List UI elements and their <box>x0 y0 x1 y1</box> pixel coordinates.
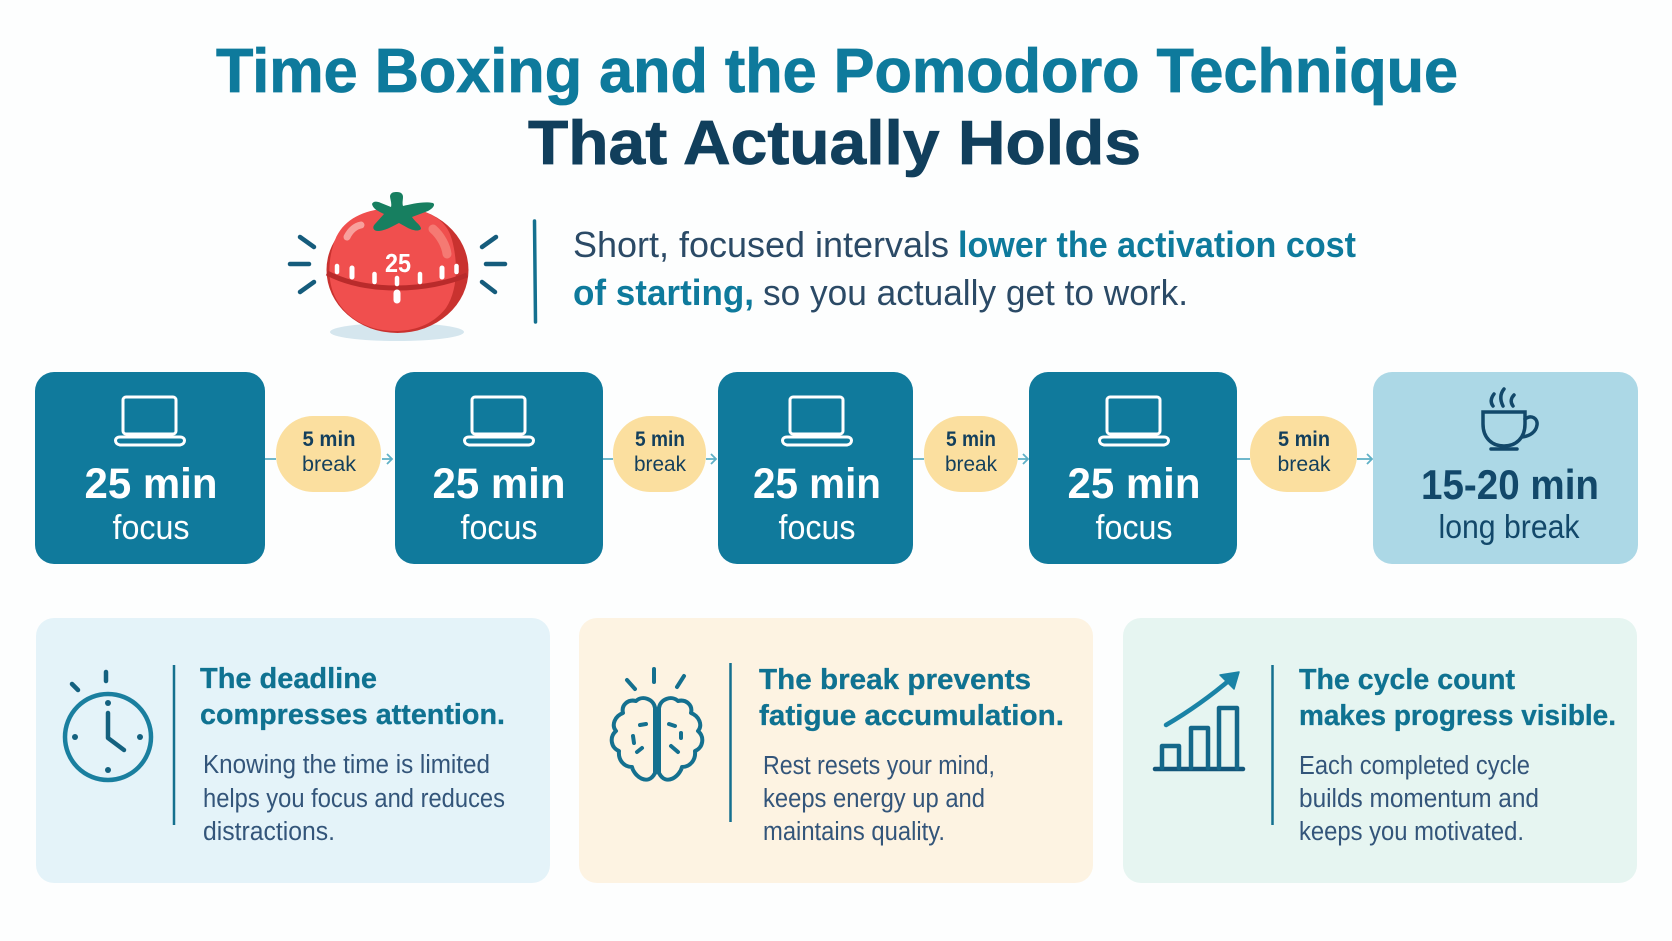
focus block 1 <box>35 372 265 564</box>
panel: cycle count: The cycle count <box>1299 664 1515 696</box>
long break block <box>1373 372 1638 564</box>
focus block 2: focus <box>460 509 538 547</box>
break pill 4 <box>1250 416 1357 492</box>
subtitle divider <box>534 221 536 322</box>
panel: cycle count: builds momentum and <box>1299 785 1539 813</box>
panel: deadline: Knowing the time is limited <box>203 751 490 779</box>
break pill 3: 5 min <box>946 428 996 451</box>
panel: break <box>579 618 1093 883</box>
title <box>216 37 1458 178</box>
focus block 4: 25 min <box>1068 460 1200 508</box>
subtitle: lower the activation cost <box>958 224 1356 265</box>
connectors and arrows <box>265 454 1372 464</box>
break pill 4: 5 min <box>1278 428 1330 451</box>
panel: break: fatigue accumulation. <box>759 700 1064 732</box>
panel: cycle count <box>1123 618 1637 883</box>
focus block 2 <box>395 372 603 564</box>
subtitle: of starting, <box>573 272 754 313</box>
focus block 1: 25 min <box>84 460 218 508</box>
break pill 1 <box>276 416 381 492</box>
focus block 4 <box>1029 372 1237 564</box>
panel: deadline: distractions. <box>203 818 335 846</box>
panel: deadline: compresses attention. <box>200 699 505 731</box>
panel: break: keeps energy up and <box>763 785 985 813</box>
break pill 2 <box>613 416 706 492</box>
icon: tomato timer <box>326 192 468 341</box>
focus block 3 <box>718 372 913 564</box>
break pill 4: break <box>1278 453 1331 476</box>
break pill 1: 5 min <box>302 428 356 451</box>
panel: break: Rest resets your mind, <box>763 752 995 780</box>
panel: deadline: helps you focus and reduces <box>203 785 505 813</box>
icon: clock <box>65 672 151 780</box>
panel: cycle count: Each completed cycle <box>1299 752 1530 780</box>
panel: break: The break prevents <box>759 664 1031 696</box>
icon: ticking rays <box>290 237 505 292</box>
subtitle: so you actually get to work. <box>763 272 1188 313</box>
title: Time Boxing and the Pomodoro Technique <box>216 37 1458 106</box>
focus block 3: focus <box>778 509 856 547</box>
icon: brain <box>612 669 702 780</box>
focus block 4: focus <box>1096 509 1172 547</box>
panel: deadline: The deadline <box>200 663 377 695</box>
break pill 2: 5 min <box>635 428 685 451</box>
panel: break: maintains quality. <box>763 818 945 846</box>
focus block 3: 25 min <box>753 460 881 508</box>
subtitle: Short, focused intervals <box>573 224 949 265</box>
panel: cycle count: makes progress visible. <box>1299 700 1616 732</box>
break pill 2: break <box>634 453 686 476</box>
break pill 3 <box>924 416 1018 492</box>
long break block: long break <box>1438 508 1580 545</box>
long break block: 15-20 min <box>1421 461 1599 508</box>
icon: rising bar chart <box>1155 672 1243 769</box>
focus block 1: focus <box>112 509 190 547</box>
icon: tomato timer: 25 <box>385 248 411 278</box>
subtitle <box>573 224 1356 313</box>
break pill 3: break <box>945 453 997 476</box>
panel: cycle count: keeps you motivated. <box>1299 818 1524 846</box>
break pill 1: break <box>302 453 357 476</box>
title: That Actually Holds <box>528 109 1141 178</box>
focus block 2: 25 min <box>432 460 566 508</box>
panel: deadline <box>36 618 550 883</box>
